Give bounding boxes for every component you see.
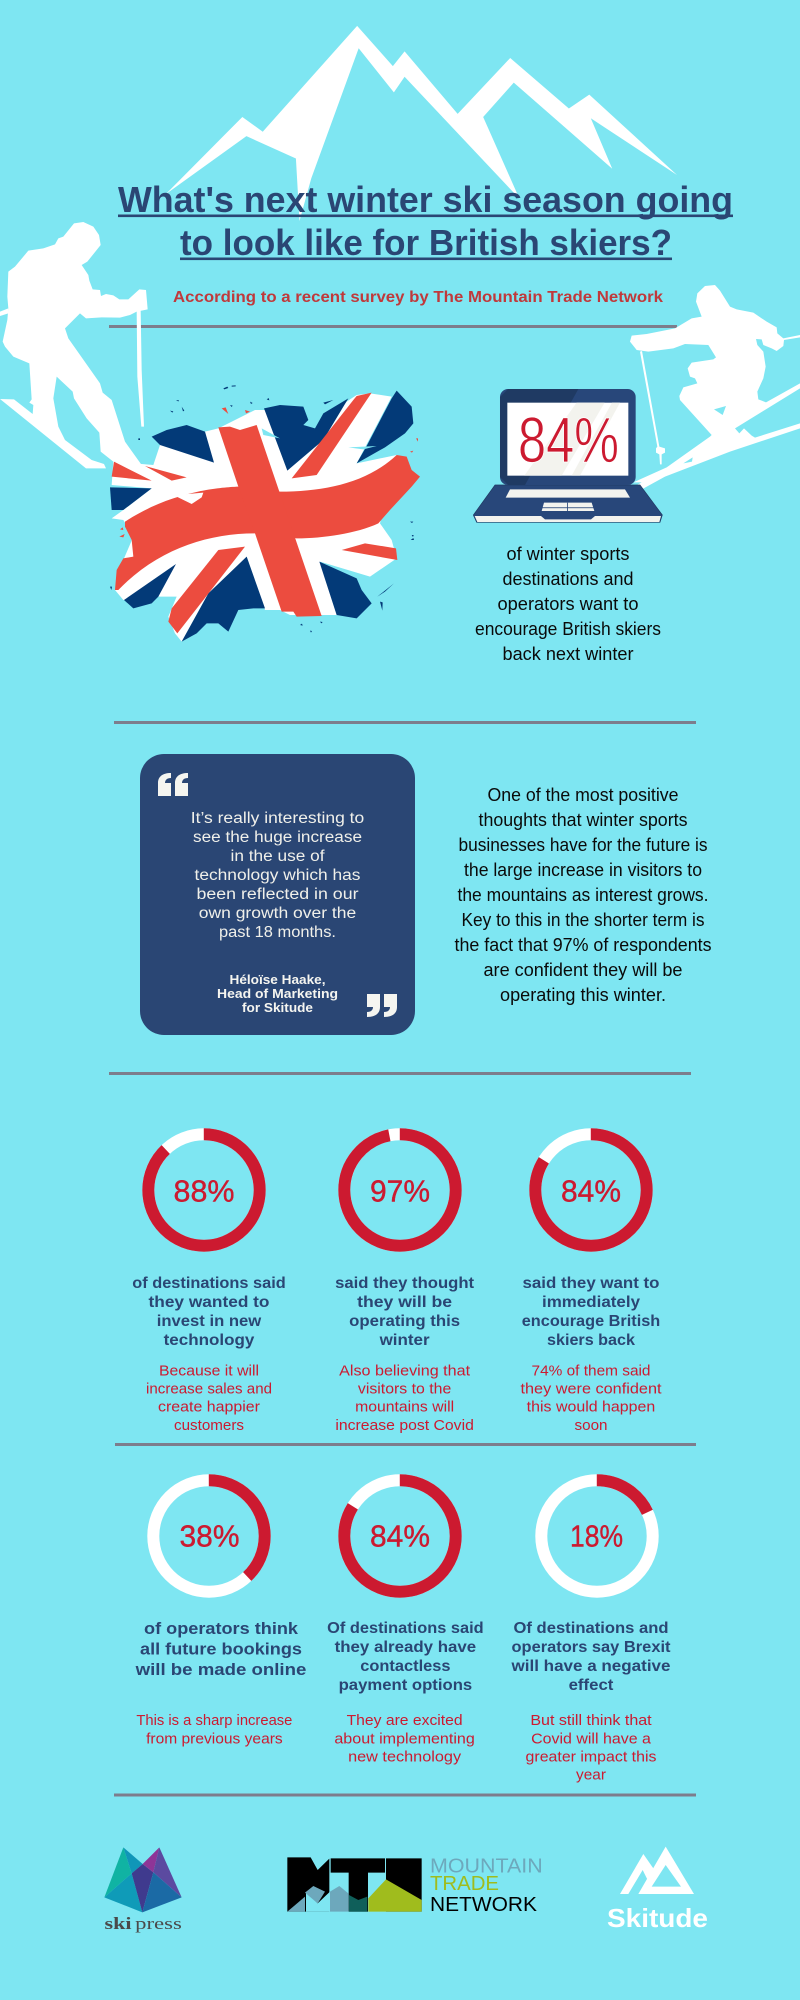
stat note: greater impact this: [526, 1748, 656, 1765]
stat description: contactless: [360, 1658, 451, 1675]
donut chart 38%: [153, 1480, 265, 1592]
donut chart 84%: 84%: [370, 1519, 430, 1554]
donut chart 88%: [148, 1134, 260, 1246]
text block: intro paragraph: the fact that 97% of respondents: [454, 935, 712, 955]
quote text: past 18 months.: [219, 924, 336, 941]
quote text: see the huge increase: [193, 829, 362, 846]
text block: intro paragraph: Key to this in the shorter term is: [462, 910, 704, 930]
icon: closing quote mark: [367, 994, 397, 1017]
stat note: about implementing: [334, 1730, 475, 1747]
donut chart 18%: 18%: [570, 1519, 623, 1554]
stat note: they were confident: [520, 1381, 662, 1398]
icon: right skier silhouette: [630, 285, 800, 490]
stat description: [522, 1275, 660, 1349]
text block: laptop caption: of winter sports: [506, 544, 630, 564]
quote attribution: Head of Marketing: [217, 986, 338, 1001]
text block: laptop caption: operators want to: [498, 594, 638, 614]
donut chart 84%: [344, 1480, 456, 1592]
stat description: payment options: [339, 1677, 472, 1694]
stat description: encourage British: [522, 1313, 660, 1330]
stat note: But still think that: [530, 1712, 653, 1729]
panel: stat 38%: [135, 1480, 306, 1747]
icon: laptop with 84%: 84%: [518, 404, 619, 476]
text block: intro paragraph: operating this winter.: [500, 985, 666, 1005]
title: [118, 179, 733, 263]
logo: ski press: press: [135, 1914, 182, 1933]
stat description: of operators think: [144, 1619, 299, 1638]
panel: stat 88%: [132, 1134, 286, 1434]
stat description: [135, 1619, 306, 1679]
stat note: 74% of them said: [532, 1363, 650, 1380]
logo: skitude: [607, 1847, 708, 1933]
quote text: own growth over the: [199, 905, 356, 922]
panel: stat 84% immediately: [520, 1134, 662, 1434]
stat note: year: [576, 1766, 606, 1783]
stat note: customers: [174, 1417, 244, 1434]
text block: intro paragraph: businesses have for the future is: [458, 835, 708, 855]
stat description: Of destinations and: [514, 1620, 668, 1637]
logo: mountain trade network: [287, 1855, 543, 1916]
stat note: visitors to the: [358, 1381, 451, 1398]
logo: ski press: ski: [104, 1914, 132, 1933]
text block: intro paragraph: [454, 785, 712, 1005]
stat description: operators say Brexit: [512, 1639, 671, 1656]
stat description: Of destinations said: [327, 1620, 484, 1637]
stat description: technology: [164, 1332, 254, 1349]
stat note: from previous years: [146, 1730, 283, 1747]
donut chart 18%: [541, 1480, 653, 1592]
stat note: increase post Covid: [335, 1417, 474, 1434]
stat note: mountains will: [355, 1399, 454, 1416]
stat description: said they want to: [522, 1275, 660, 1292]
quote attribution: for Skitude: [242, 1000, 313, 1015]
text block: laptop caption: back next winter: [502, 644, 634, 664]
stat note: [136, 1712, 292, 1747]
stat description: [510, 1620, 671, 1694]
stat note: increase sales and: [146, 1381, 272, 1398]
stat description: all future bookings: [140, 1639, 302, 1658]
donut chart 84%: [535, 1134, 647, 1246]
stat description: they already have: [335, 1639, 476, 1656]
stat description: of destinations said: [132, 1275, 286, 1292]
donut chart 97%: 97%: [370, 1174, 430, 1208]
stat note: create happier: [158, 1399, 260, 1416]
text block: laptop caption: destinations and: [502, 569, 634, 589]
logo: mountain trade network: TRADE: [430, 1872, 499, 1895]
logo: skitude: Skitude: [607, 1903, 708, 1933]
stat description: [335, 1275, 475, 1349]
stat note: [335, 1363, 474, 1434]
stat description: winter: [379, 1332, 430, 1349]
stat note: new technology: [348, 1748, 462, 1765]
icon: laptop with 84%: [473, 389, 662, 522]
mountain illustration: [166, 26, 677, 221]
stat description: they will be: [357, 1294, 452, 1311]
stat description: will be made online: [135, 1660, 306, 1679]
quote text: It’s really interesting to: [191, 810, 364, 827]
text block: intro paragraph: thoughts that winter sports: [478, 810, 688, 830]
text block: laptop caption: encourage British skiers: [475, 619, 661, 639]
logo: mountain trade network: NETWORK: [430, 1893, 537, 1916]
stat description: will have a negative: [510, 1658, 671, 1675]
stat note: Covid will have a: [531, 1730, 652, 1747]
stat note: [520, 1363, 662, 1434]
stat description: immediately: [542, 1294, 640, 1311]
stat description: skiers back: [547, 1332, 635, 1349]
stat description: [327, 1620, 484, 1694]
stat note: They are excited: [347, 1712, 463, 1729]
icon: opening quote mark: [158, 773, 188, 796]
stat note: soon: [574, 1417, 608, 1434]
stat description: operating this: [349, 1313, 460, 1330]
icon: left skier silhouette: [0, 222, 148, 468]
stat description: effect: [569, 1677, 614, 1694]
icon: union jack flag: [110, 385, 420, 642]
quote text: [191, 810, 364, 941]
stat note: this would happen: [527, 1399, 655, 1416]
stat note: Because it will: [159, 1363, 259, 1380]
logo: ski press: [104, 1847, 182, 1933]
text block: intro paragraph: One of the most positive: [488, 785, 678, 805]
panel: quote card: [140, 754, 415, 1035]
stat description: [132, 1275, 286, 1349]
quote text: technology which has: [194, 867, 361, 884]
stat description: invest in new: [157, 1313, 262, 1330]
stat description: they wanted to: [148, 1294, 270, 1311]
donut chart 84%: 84%: [561, 1174, 621, 1208]
text block: intro paragraph: the large increase in visitors to: [464, 860, 702, 880]
text block: intro paragraph: the mountains as interest grows.: [458, 885, 708, 905]
quote text: been reflected in our: [196, 886, 358, 903]
stat note: This is a sharp increase: [136, 1712, 292, 1729]
quote attribution: [217, 972, 338, 1015]
panel: stat 18%: [510, 1480, 671, 1783]
subtitle: According to a recent survey by The Mountain Trade Network: [173, 289, 663, 306]
title: What's next winter ski season going: [118, 179, 733, 220]
quote text: in the use of: [230, 848, 325, 865]
stat note: Also believing that: [339, 1363, 471, 1380]
quote attribution: Héloïse Haake,: [230, 972, 326, 987]
donut chart 97%: [344, 1134, 456, 1246]
text block: intro paragraph: are confident they will be: [484, 960, 682, 980]
title: to look like for British skiers?: [180, 222, 672, 263]
stat note: [526, 1712, 656, 1783]
panel: stat 84% contactless: [327, 1480, 484, 1765]
donut chart 38%: 38%: [180, 1519, 240, 1554]
stat note: [334, 1712, 475, 1765]
stat description: said they thought: [335, 1275, 475, 1292]
logo: mountain trade network: MOUNTAIN: [430, 1855, 543, 1878]
donut chart 88%: 88%: [174, 1174, 234, 1208]
panel: stat 97%: [335, 1134, 475, 1434]
text block: laptop caption: [475, 544, 661, 664]
stat note: [146, 1363, 272, 1434]
